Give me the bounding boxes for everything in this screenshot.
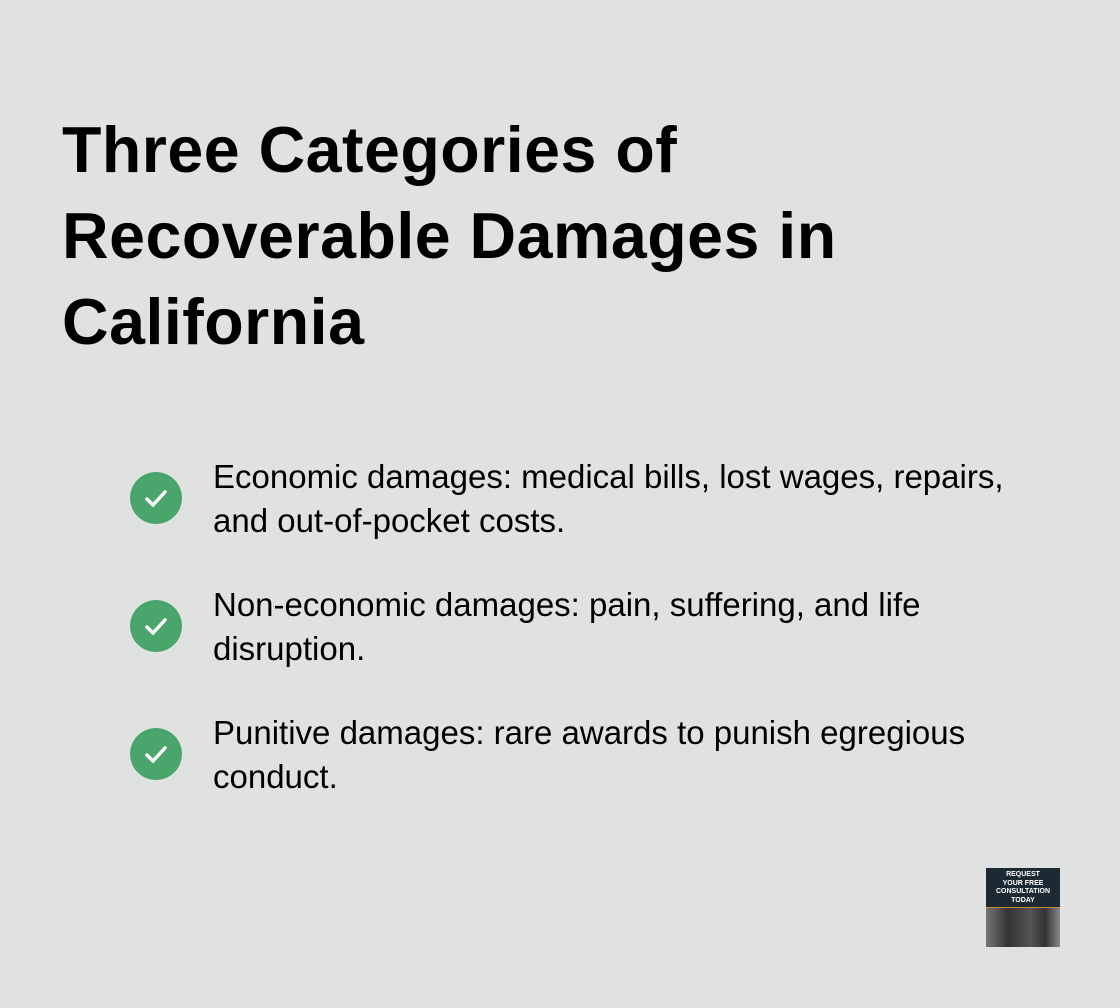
title: California xyxy=(62,286,364,358)
icon: check xyxy=(130,472,182,524)
text: Punitive damages: rare awards to punish egregious conduct. xyxy=(213,714,965,795)
logo: consultation badge xyxy=(986,868,1060,947)
logo: consultation badge: CONSULTATION xyxy=(996,888,1050,895)
text: Economic damages: medical bills, lost wages, repairs, and out-of-pocket costs. xyxy=(213,458,1004,539)
item: economic xyxy=(130,458,1004,539)
title: Recoverable Damages in xyxy=(62,200,837,272)
logo: consultation badge: TODAY xyxy=(1011,896,1035,904)
text: Non-economic damages: pain, suffering, and life disruption. xyxy=(213,586,920,667)
item: non-economic xyxy=(130,586,920,667)
title xyxy=(62,114,837,358)
icon: check xyxy=(130,728,182,780)
logo: consultation badge: YOUR FREE xyxy=(1003,880,1043,886)
title: Three Categories of xyxy=(62,114,677,186)
logo: consultation badge: REQUEST xyxy=(1006,871,1040,878)
item: punitive xyxy=(130,714,965,795)
icon: check xyxy=(130,600,182,652)
